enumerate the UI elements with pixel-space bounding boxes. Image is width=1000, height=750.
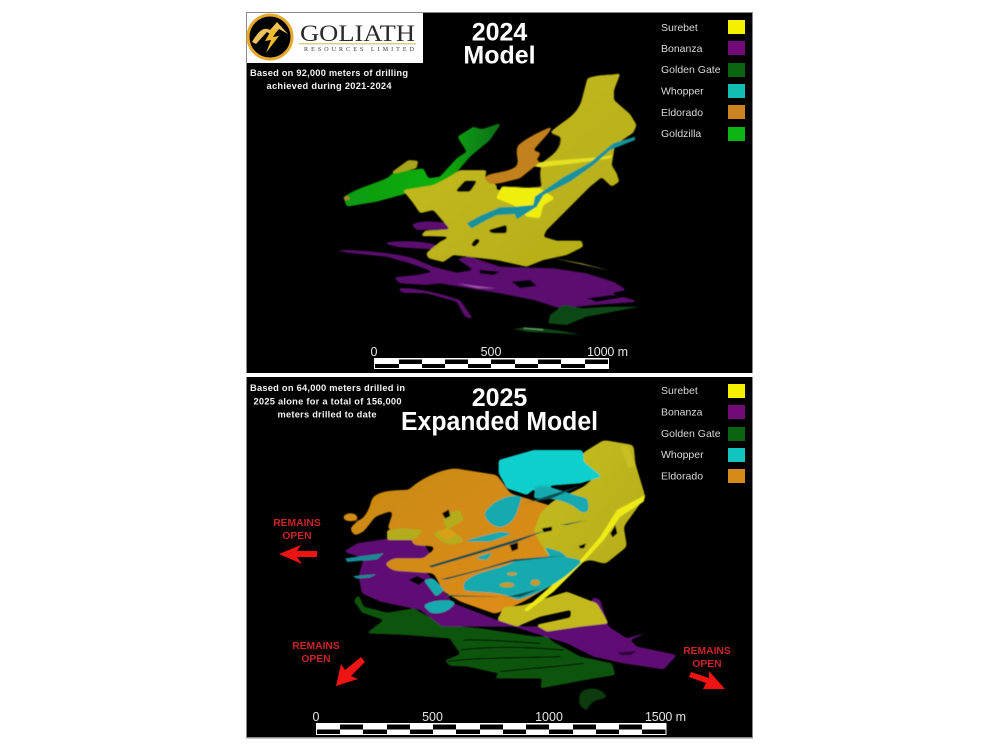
- title: 2025: [472, 384, 527, 412]
- callout: remains open southwest: OPEN: [301, 654, 331, 665]
- callout: remains open west: [273, 518, 321, 564]
- callout: remains open southwest: REMAINS: [292, 641, 340, 652]
- legend: 2024: Goldzilla: [661, 128, 701, 140]
- panel frame: [246, 12, 753, 738]
- legend: 2024: Eldorado: [661, 107, 703, 119]
- deposit: Surebet 2025 main wall: [534, 440, 645, 580]
- callout: remains open southwest: [292, 641, 365, 686]
- callout: remains open west: REMAINS: [273, 518, 321, 529]
- arrow: west: [279, 545, 317, 564]
- scale bar: 2025: 1500 m: [645, 710, 686, 724]
- Surebet small lobes: [387, 510, 464, 544]
- title: [401, 384, 598, 436]
- legend: 2025: Surebet: [661, 385, 698, 397]
- Surebet bottom lobe: [497, 592, 609, 632]
- deposit: Surebet 2024: [390, 73, 637, 267]
- legend: 2024: Golden Gate: [661, 64, 721, 76]
- deposit: Bonanza 2025: [344, 532, 677, 669]
- Bonanza whopper slivers: [345, 553, 384, 579]
- note: drilling to date: 2025 alone for a total of 156,000: [254, 396, 402, 406]
- note: drilling to date: [250, 383, 405, 420]
- Surebet bright edge: [524, 495, 645, 612]
- scale bar: 2025: 500: [422, 710, 443, 724]
- deposit: Golden Gate 2025: [354, 595, 615, 688]
- deposit: Whopper 2024: [467, 137, 635, 228]
- note: drilling 2021-2024: [250, 68, 408, 91]
- arrow: southwest: [336, 657, 365, 686]
- scale bar: 2025: 0: [313, 710, 320, 724]
- note: drilling to date: meters drilled to date: [278, 410, 376, 420]
- title: 2024: [472, 18, 527, 46]
- deposit: Eldorado 2025: [342, 468, 584, 614]
- deposit: Golden Gate 2024: [513, 305, 639, 335]
- Golden Gate streaks: [447, 640, 584, 672]
- 3D model: 2024 deposits: [322, 73, 640, 335]
- arrow: southeast: [689, 671, 725, 689]
- title: [463, 18, 536, 70]
- panel: 2024 model: [247, 13, 752, 373]
- logo: GOLIATH: [300, 21, 415, 46]
- legend: 2024: [661, 20, 745, 141]
- note: drilling 2021-2024: Based on 92,000 meters of drilling: [250, 68, 408, 78]
- panel separator: [246, 373, 753, 377]
- callout: remains open southeast: REMAINS: [683, 646, 731, 657]
- scale bar: 2025: 1000: [535, 710, 563, 724]
- callout: remains open southeast: OPEN: [692, 659, 722, 670]
- scale bar: 2024: 500: [481, 345, 501, 359]
- callout: remains open west: OPEN: [282, 531, 312, 542]
- logo: RESOURCES LIMITED: [304, 47, 415, 53]
- legend: 2025: Golden Gate: [661, 428, 721, 440]
- 3D model: 2025 deposits: [342, 440, 677, 710]
- legend: 2025: Whopper: [661, 449, 704, 461]
- title: Expanded Model: [401, 408, 598, 436]
- title: Model: [463, 42, 536, 70]
- callout: remains open southeast: [683, 646, 731, 689]
- Whopper inclusions: [500, 572, 540, 587]
- legend: 2024: Bonanza: [661, 43, 703, 55]
- legend: 2025: Eldorado: [661, 470, 703, 482]
- dark gaps in Bonanza: [480, 270, 627, 302]
- scale bar: 2025: [313, 710, 686, 735]
- deposit: Golden Gate deep blob: [579, 689, 606, 710]
- legend: 2025: [661, 384, 745, 483]
- gaps in Surebet: [455, 134, 561, 247]
- bright Surebet zone: [496, 187, 555, 218]
- legend: 2024: Whopper: [661, 86, 704, 98]
- deposit: Eldorado 2024: [484, 126, 553, 184]
- panel: 2025 expanded model: [247, 377, 752, 737]
- scale bar: 2024: 1000 m: [587, 345, 628, 359]
- deposit: Bonanza 2024: [322, 221, 640, 319]
- legend: 2024: Surebet: [661, 22, 698, 34]
- deposit: Goldzilla: [343, 123, 502, 207]
- black gaps: [442, 509, 617, 551]
- logo: [247, 13, 423, 63]
- scale bar: 2024: 0: [371, 345, 378, 359]
- note: drilling to date: Based on 64,000 meters drilled in: [250, 383, 405, 393]
- note: drilling 2021-2024: achieved during 2021-2024: [266, 81, 392, 91]
- dark seams: [429, 486, 587, 597]
- deposit: Whopper 2025: [424, 450, 602, 613]
- legend: 2025: Bonanza: [661, 406, 703, 418]
- scale bar: 2024: [371, 345, 628, 369]
